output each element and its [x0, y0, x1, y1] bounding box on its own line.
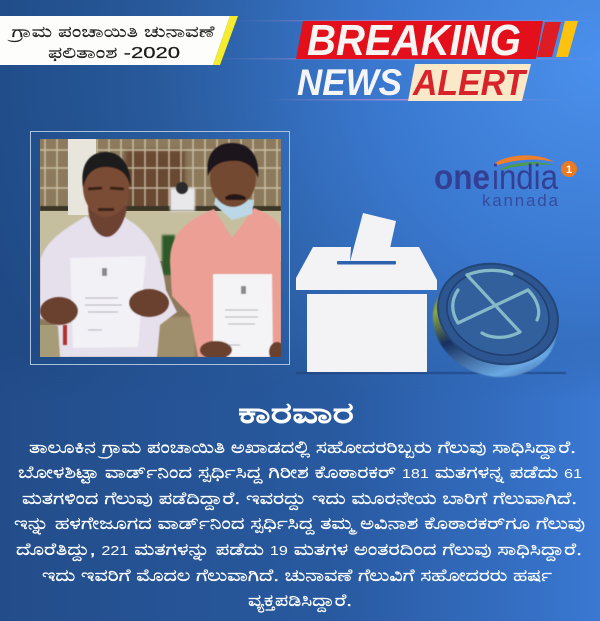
photo panel: [30, 132, 290, 364]
ballot paper: [350, 213, 396, 262]
yellow slash: [556, 21, 578, 57]
ballot box: [296, 213, 566, 374]
kannada wordmark: kannada: [482, 191, 559, 210]
badge: [561, 161, 577, 177]
body paragraph: ಇನ್ನು ಹಳಗೇಜೂಗದ ವಾರ್ಡ್‌ನಿಂದ ಸ್ಪರ್ಧಿಸಿದ್ದ ತಮ್ಮ ಅವಿನಾಶ ಕೊಠಾರಕರ್‌ಗೂ ಗೆಲುವು: [14, 514, 585, 535]
white banner shape: [0, 16, 230, 65]
body paragraph: [14, 438, 585, 613]
banner title: ಫಲಿತಾಂಶ -2020: [48, 45, 180, 62]
red slash: [537, 22, 561, 57]
badge number: 1: [566, 164, 572, 176]
box body: [307, 294, 427, 372]
body paragraph: ತಾಲೂಕಿನ ಗ್ರಾಮ ಪಂಚಾಯಿತಿ ಅಖಾಡದಲ್ಲಿ ಸಹೋದರರಿಬ್ಬರು ಗೆಲುವು ಸಾಧಿಸಿದ್ದಾರೆ.: [29, 438, 576, 459]
inner ring: [436, 258, 560, 368]
body paragraph: ವ್ಯಕ್ತಪಡಿಸಿದ್ದಾರೆ.: [248, 591, 352, 613]
man left: [40, 152, 177, 357]
slot: [337, 261, 396, 264]
hands and certificate right: [200, 274, 285, 362]
oneindia kannada logo: [434, 155, 577, 210]
body paragraph: ಮತಗಳಿಂದ ಗೆಲುವು ಪಡೆದಿದ್ದಾರೆ. ಇವರದ್ದು ಇದು ಮೂರನೇಯ ಬಾರಿಗೆ ಗೆಲುವಾಗಿದೆ.: [22, 489, 577, 510]
breaking text: BREAKING: [307, 16, 521, 65]
election symbol coin: [419, 249, 571, 393]
flag arc: [495, 155, 554, 166]
banner title: [7, 24, 215, 62]
alert tag: [408, 64, 531, 101]
man right: [170, 143, 281, 357]
coin edge: [419, 253, 571, 393]
yellow slash: [213, 16, 238, 65]
swastika-style voting mark: [453, 270, 539, 337]
breaking news alert logo: [296, 16, 578, 103]
ground shadow: [296, 372, 566, 374]
coin face: [425, 249, 571, 379]
india wordmark: india: [492, 158, 558, 197]
news text: NEWS: [297, 62, 402, 103]
glow streaks: [210, 20, 600, 100]
banner title: ಗ್ರಾಮ ಪಂಚಾಯಿತಿ ಚುನಾವಣೆ: [7, 24, 215, 43]
box lid: [296, 247, 437, 290]
oneindia wordmark: one: [434, 158, 490, 197]
breaking red bar: [296, 21, 543, 59]
photo frame: [30, 132, 290, 364]
location heading: ಕಾರವಾರ: [238, 397, 354, 430]
alert text: ALERT: [412, 62, 528, 103]
photo: two men holding certificates: [40, 139, 285, 362]
hands and certificate left: [40, 256, 169, 348]
body paragraph: ದೊರೆತಿದ್ದು, 221 ಮತಗಳನ್ನು ಪಡೆದು 19 ಮತಗಳ ಅಂತರದಿಂದ ಗೆಲುವು ಸಾಧಿಸಿದ್ದಾರೆ.: [16, 540, 582, 561]
header banner: election results: [0, 16, 238, 65]
body paragraph: ಬೋಳಶಿಟ್ಟಾ ವಾರ್ಡ್‌ನಿಂದ ಸ್ಪರ್ಧಿಸಿದ್ದ ಗಿರೀಶ ಕೊಠಾರಕರ್ 181 ಮತಗಳನ್ನ ಪಡೆದು 61: [18, 463, 582, 484]
body paragraph: ಇದು ಇವರಿಗೆ ಮೊದಲ ಗೆಲುವಾಗಿದೆ. ಚುನಾವಣೆ ಗೆಲುವಿಗೆ ಸಹೋದರರು ಹರ್ಷ: [42, 566, 552, 585]
